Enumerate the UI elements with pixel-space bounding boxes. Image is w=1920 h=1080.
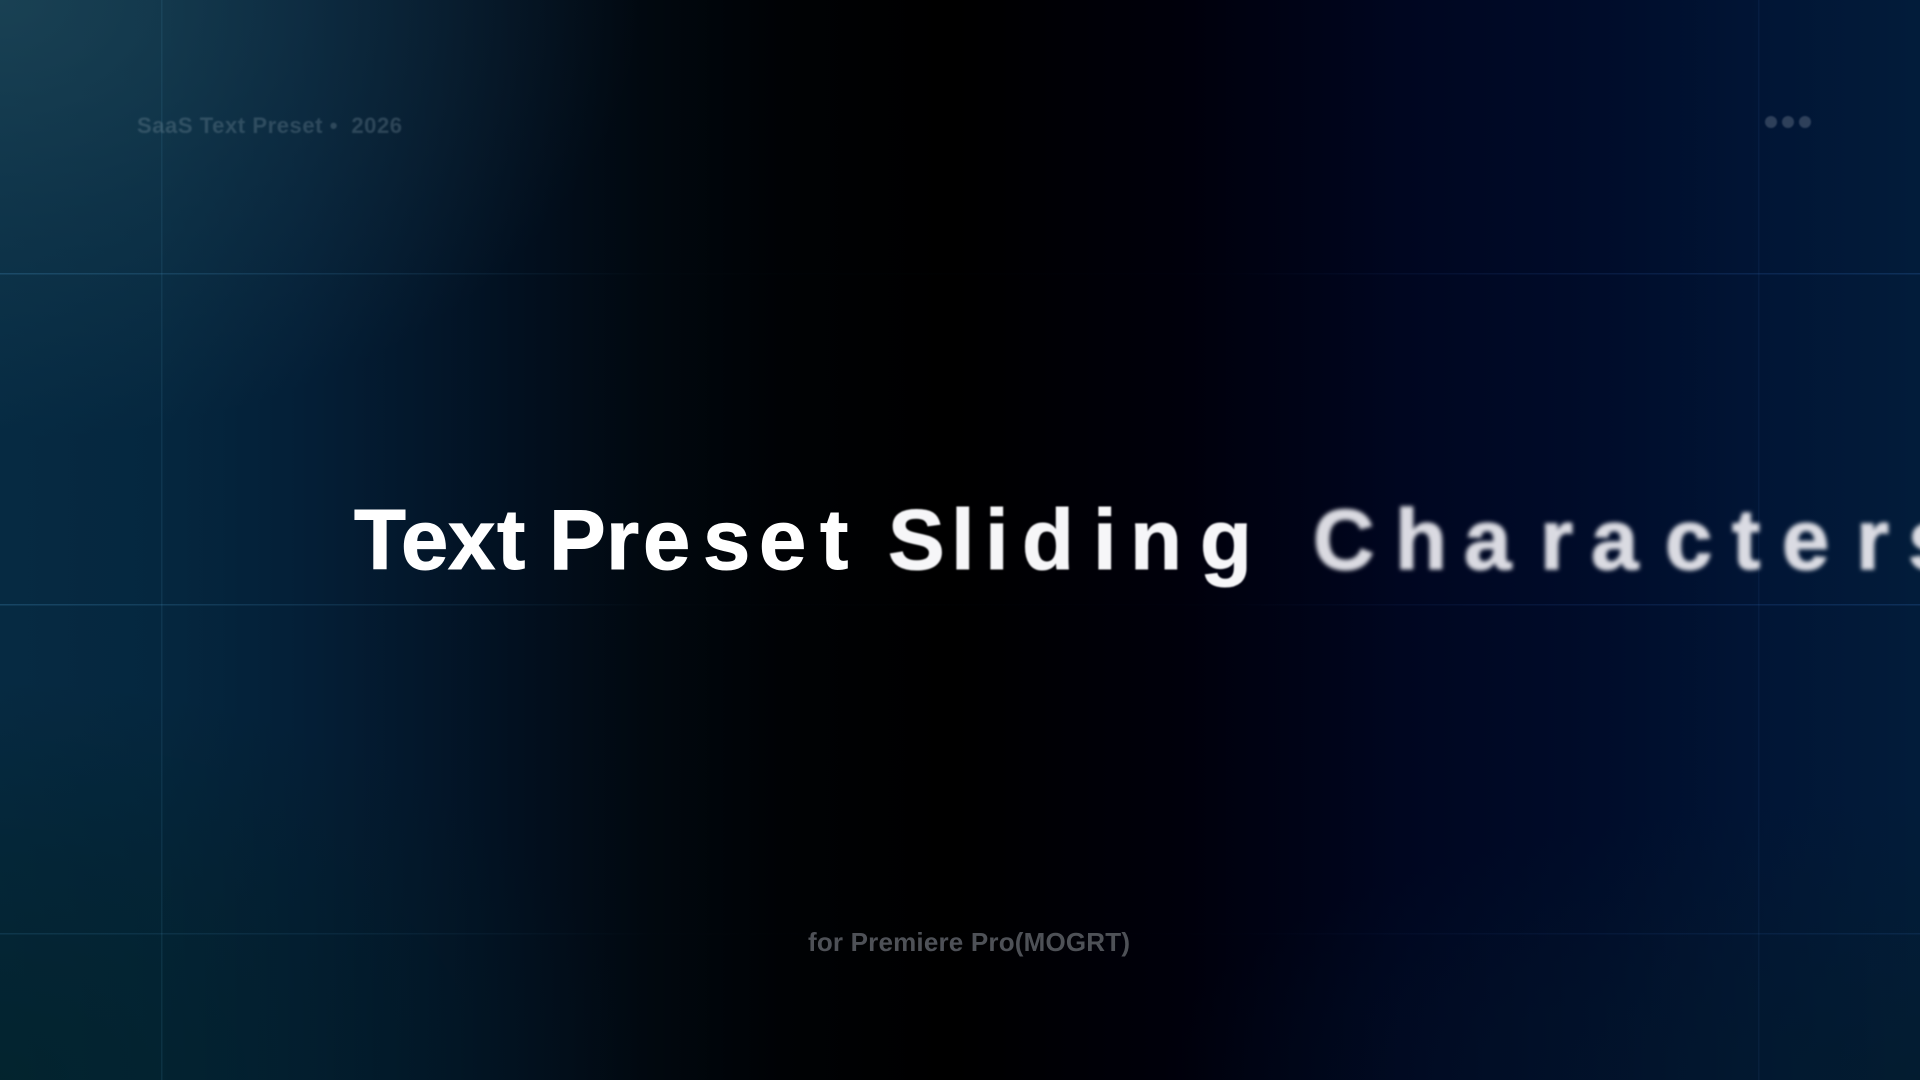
headline word: Sliding: Sliding bbox=[888, 493, 1252, 588]
headline: Text Preset Sliding Characters bbox=[354, 493, 1920, 588]
headline sharp words: TextPreset bbox=[354, 493, 848, 588]
menu dots icon bbox=[1765, 116, 1811, 128]
bottom caption: for Premiere Pro(MOGRT) bbox=[808, 927, 1130, 957]
top label: SaaS Text Preset 2026: SaaS Text Preset • 2026 bbox=[137, 113, 402, 138]
